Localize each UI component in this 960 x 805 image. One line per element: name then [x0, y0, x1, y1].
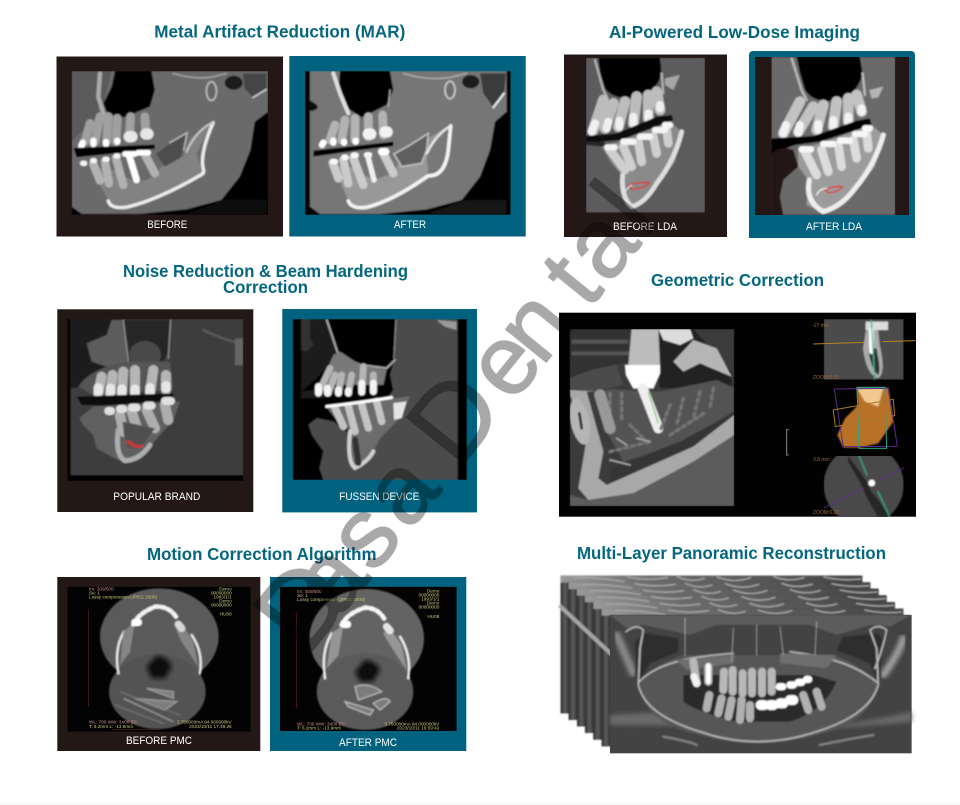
- view: 3D render: [833, 387, 897, 448]
- panel: popular brand: [57, 309, 253, 512]
- CT image: axial slice after PMC: Lossy compression (JPEG 2000): [297, 597, 366, 602]
- CT image: jaw after LDA: [771, 57, 896, 215]
- heading: Motion Correction Algorithm: Motion Correction Algorithm: [147, 544, 376, 564]
- CT image: axial slice before PMC: 1993/1/1: [214, 594, 232, 599]
- image stack: panoramic layers: [561, 576, 912, 753]
- panel: LDA after: [749, 51, 915, 238]
- view captions: ZOOM:6.20: [813, 375, 839, 381]
- view captions: -17 mm: [812, 323, 829, 329]
- section: Motion Correction Algorithm: [57, 544, 466, 751]
- CT image: jaw after MAR: [305, 71, 511, 215]
- watermark: enta: [443, 187, 659, 418]
- CT image: axial slice before PMC: Se: 1: [89, 591, 100, 596]
- label: POPULAR BRAND: POPULAR BRAND: [113, 491, 200, 503]
- heading: Noise Reduction & Beam Hardening Correction: Correction: [223, 277, 308, 297]
- CT image: axial slice after PMC: 00000000: [419, 605, 440, 610]
- CT image: axial slice before PMC: 2023/10/11 17:39:25: [189, 724, 232, 729]
- CT image: axial slice before PMC: [68, 586, 250, 732]
- label: AFTER: AFTER: [394, 219, 426, 231]
- measurement scale: [787, 430, 789, 455]
- CT image: axial slice before PMC: WL: 700 WW: 3400 [D]: [89, 720, 137, 725]
- CT image: jaw before MAR: [72, 71, 268, 215]
- view captions: 3.8 mm: [813, 457, 830, 463]
- section: Multi-Layer Panoramic Reconstruction: [561, 543, 912, 753]
- label: BEFORE LDA: BEFORE LDA: [613, 221, 678, 233]
- CT image: axial slice after PMC: 3.750000mA 94.000000kV: [384, 721, 440, 726]
- view captions: ZOOM:6.20: [813, 510, 839, 516]
- CT image: jaw before LDA: [586, 58, 705, 213]
- panel: MAR before: [56, 56, 283, 236]
- CT image: axial slice after PMC: HU08: [427, 614, 440, 619]
- CT image: axial slice before PMC: HU08: [220, 612, 232, 617]
- section: Geometric Correction: [559, 270, 916, 525]
- CT image: axial slice after PMC: [280, 586, 457, 731]
- section: AI-Powered Low-Dose Imaging: [564, 22, 915, 238]
- CT image: axial slice before PMC: Im: 309/500: [89, 587, 114, 592]
- CT image: axial slice after PMC: Demo: [427, 601, 440, 606]
- label: BEFORE PMC: BEFORE PMC: [126, 735, 192, 747]
- label: AFTER PMC: AFTER PMC: [339, 737, 397, 749]
- heading: Noise Reduction & Beam Hardening Correction: Noise Reduction & Beam Hardening: [123, 261, 408, 281]
- CT image: axial slice after PMC: Im: 309/500: [297, 589, 322, 594]
- view: orange line: [813, 341, 916, 344]
- CT image: axial slice before PMC: 00000000: [211, 590, 232, 595]
- heading: Multi-Layer Panoramic Reconstruction: Multi-Layer Panoramic Reconstruction: [577, 543, 886, 563]
- CT image: axial slice before PMC: Lossy compression (JPEG 2000): [89, 595, 158, 600]
- watermark: D: [382, 348, 525, 485]
- view: axial slice: [824, 456, 904, 517]
- panel: before PMC: [57, 577, 260, 751]
- CT image: axial slice before PMC: T: 6.2mm L: -13.9mm: [89, 724, 133, 729]
- view captions: [812, 323, 839, 516]
- back layers: [561, 576, 903, 746]
- panel: MAR after: [289, 56, 526, 236]
- panel: LDA before: [564, 54, 727, 237]
- CT image: axial slice after PMC: 00000000: [419, 593, 440, 598]
- CT image: popular brand jaw: [68, 319, 244, 481]
- section: Noise Reduction and Beam Hardening Correction: [57, 261, 477, 512]
- watermark: l: [569, 160, 678, 254]
- view: sagittal slice: [824, 319, 904, 380]
- CT image: Fussen device jaw: [292, 319, 467, 480]
- front panoramic image: [610, 615, 912, 753]
- CT image: axial slice after PMC: T: 6.2mm L: -13.9mm: [297, 725, 341, 730]
- CT image: axial slice before PMC: Demo: [219, 598, 232, 603]
- label: AFTER LDA: AFTER LDA: [806, 221, 863, 233]
- watermark: asa: [268, 416, 473, 633]
- label: BEFORE: BEFORE: [147, 219, 187, 231]
- watermark: D: [230, 536, 373, 673]
- heading: AI-Powered Low-Dose Imaging: AI-Powered Low-Dose Imaging: [609, 22, 860, 42]
- heading: Metal Artifact Reduction: Metal Artifact Reduction (MAR): [154, 21, 405, 41]
- section: Metal Artifact Reduction: [56, 21, 526, 236]
- heading: Geometric Correction: Geometric Correction: [651, 270, 824, 290]
- CT image: axial slice before PMC: Demo: [219, 586, 232, 591]
- CT image: axial slice before PMC: 00000000: [211, 602, 232, 607]
- CT image: axial slice after PMC: 1993/1/1: [421, 597, 440, 602]
- panel: geometric correction: [559, 313, 916, 525]
- CT image: axial slice before PMC: 3.750000mA 94.000000kV: [177, 720, 233, 725]
- CT image: axial slice after PMC: WL: 700 WW: 3400 [D]: [297, 721, 345, 726]
- CT image: implant cross section: [570, 329, 734, 506]
- label: FUSSEN DEVICE: FUSSEN DEVICE: [339, 491, 419, 503]
- CT image: axial slice after PMC: 2023/10/11 16:59:42: [397, 725, 440, 730]
- panel: Fussen device: [282, 309, 477, 512]
- CT image: axial slice after PMC: Se: 1: [297, 593, 308, 598]
- panel: after PMC: [270, 577, 466, 751]
- CT image: axial slice after PMC: Demo: [427, 589, 440, 594]
